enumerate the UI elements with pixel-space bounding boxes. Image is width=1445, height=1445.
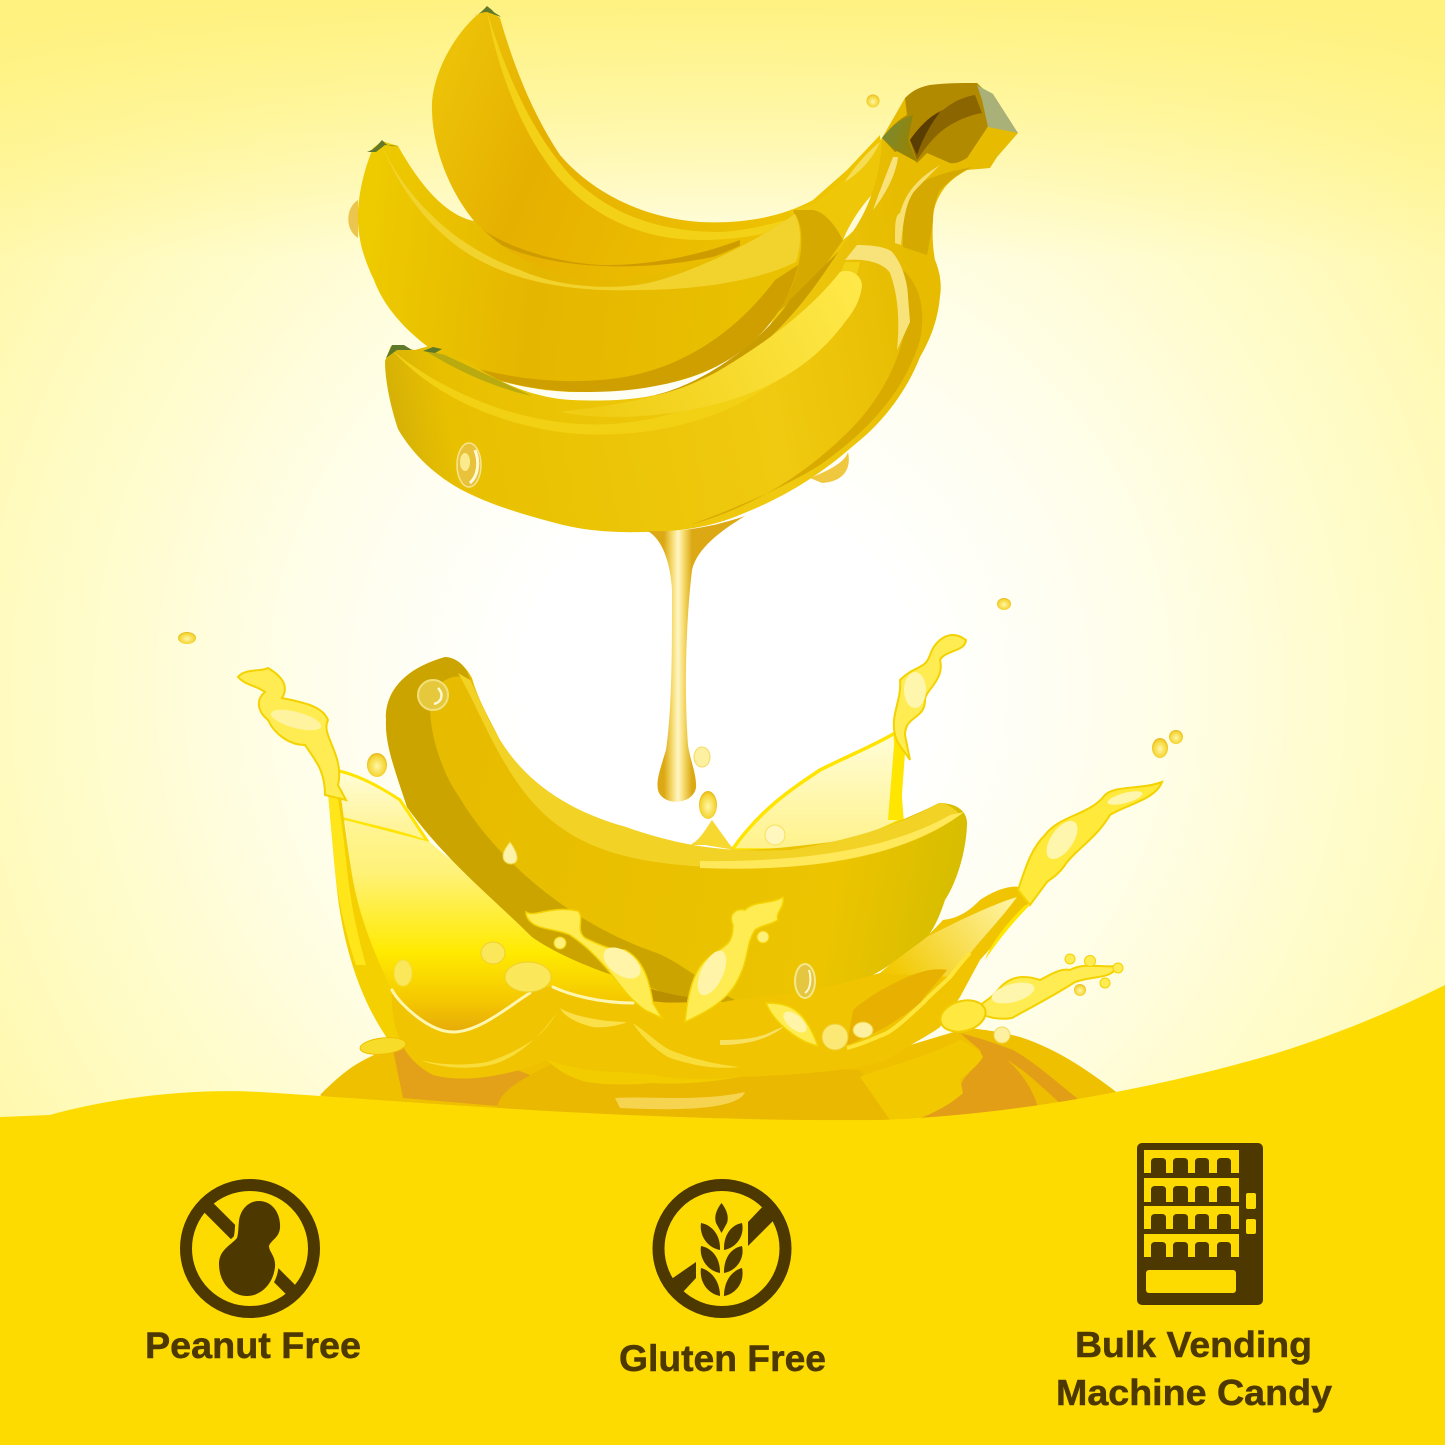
label: bulk vending machine candy: Bulk Vending xyxy=(1075,1324,1312,1365)
gap between stems xyxy=(843,187,880,240)
top light band xyxy=(392,262,860,435)
rim line xyxy=(392,987,633,1032)
strand: bottom xyxy=(766,1003,818,1046)
crown interior xyxy=(345,820,760,1050)
flat drop xyxy=(359,1036,407,1056)
icon: no gluten xyxy=(658,1185,786,1312)
pool lobe xyxy=(547,1030,740,1084)
label: bulk vending machine candy xyxy=(1056,1324,1332,1413)
strand fingers xyxy=(1065,954,1075,964)
strand: far left xyxy=(238,668,346,800)
neck highlights xyxy=(895,165,940,245)
second tip shade xyxy=(424,350,532,396)
item: peanut free xyxy=(145,1185,361,1366)
drip stream xyxy=(648,516,745,802)
left wave xyxy=(335,770,428,842)
icon: vending machine xyxy=(1137,1143,1263,1305)
yellow highlight xyxy=(560,271,862,417)
stem arm and shade xyxy=(770,138,895,325)
strand: center left xyxy=(526,909,662,1018)
banana: splash xyxy=(386,657,967,1008)
splash crown xyxy=(320,733,1123,1122)
wheat xyxy=(701,1203,743,1296)
front body xyxy=(392,880,1047,1079)
icon: no peanut xyxy=(186,1185,314,1312)
label: peanut free: Peanut Free xyxy=(145,1324,361,1366)
banana bottom shadow xyxy=(640,985,787,1008)
splash strands xyxy=(238,635,1162,1046)
pool centre xyxy=(497,1060,892,1122)
droplets xyxy=(178,94,1183,1050)
pool right lobe xyxy=(860,1040,983,1120)
body right shade xyxy=(690,270,922,525)
item: bulk vending xyxy=(1056,1143,1332,1413)
pool right stripe xyxy=(1007,1060,1062,1108)
banana bunch xyxy=(348,6,1018,532)
yellow bottom band xyxy=(0,985,1445,1445)
label: bulk vending machine candy: Machine Candy xyxy=(1056,1372,1332,1413)
pool right orange xyxy=(915,1033,1082,1122)
shadow under middle banana xyxy=(655,240,850,402)
right rim light xyxy=(847,953,970,1048)
neck shade xyxy=(903,167,973,255)
pale band xyxy=(845,245,910,350)
right strand edge xyxy=(985,905,1030,960)
strand: far right xyxy=(1018,782,1162,905)
strand: lower right xyxy=(975,966,1118,1019)
pool base xyxy=(320,1028,1123,1122)
droplet on banana xyxy=(457,443,481,487)
droplet on banana top xyxy=(418,680,448,710)
crown front xyxy=(359,880,1047,1079)
banana: bottom xyxy=(385,83,1018,532)
strand: upper right xyxy=(894,635,966,760)
pale arcs xyxy=(560,1008,627,1027)
droplet on banana right xyxy=(795,964,815,998)
label: gluten free: Gluten Free xyxy=(619,1337,826,1379)
drip under banana xyxy=(810,452,849,483)
crown left wall xyxy=(326,770,410,1052)
banana: middle xyxy=(348,140,801,392)
pool highlight xyxy=(615,1092,745,1109)
strand: center right xyxy=(685,897,783,1022)
right rear wave xyxy=(732,733,902,850)
pool orange xyxy=(393,1040,530,1108)
item: gluten free xyxy=(619,1185,826,1379)
stem cut xyxy=(882,83,1000,163)
right wedge pale xyxy=(880,897,1017,977)
right orange xyxy=(847,969,947,1045)
banana: top xyxy=(432,6,882,300)
